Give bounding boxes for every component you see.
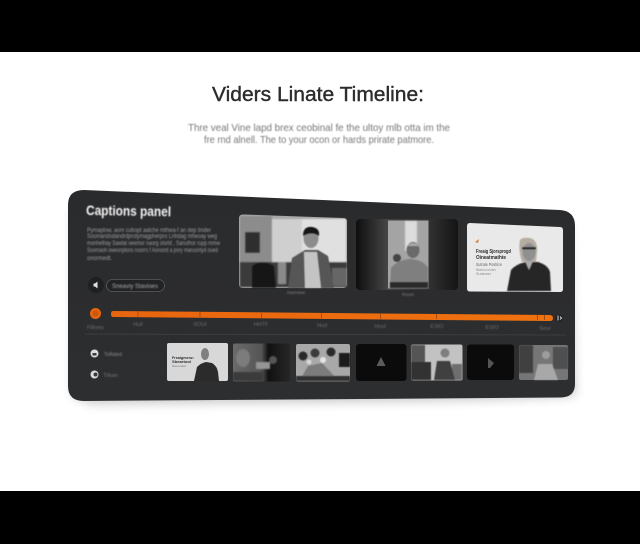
slide: presenter woman with title text: Ntoeroo uhrerv: [476, 268, 496, 272]
panel heading: Captions panel: [86, 203, 171, 219]
panel body text: Pymaplow, aom cubopt aalche mthwa-f an dep tinder: [87, 227, 212, 234]
caption style button: Sneaviy Stavioes: [112, 284, 158, 290]
track label: upload: [90, 350, 122, 358]
thumbnail 1: slide with woman: Noumstol: [172, 364, 186, 368]
timeline labels: SOUI: [193, 322, 207, 328]
subtitle text: [188, 123, 450, 146]
caption style button: [106, 280, 164, 292]
slide: presenter woman with title text: Sutrate Postrice: [476, 262, 502, 268]
thumbnail 1: slide with woman: Sbeartool: [172, 360, 191, 364]
thumbnail 5: man in office: [411, 344, 462, 380]
panel body text: Soomandodandrdprolymagpherpro Lnhdag mheoay weg: [87, 233, 217, 240]
track label: titles: [90, 370, 118, 379]
thumbnail 3: group with plants: [296, 344, 350, 382]
thumbnail 6: dark with play icon: [467, 344, 514, 380]
timeline: orange progress bar: [111, 311, 553, 321]
timeline labels: [87, 322, 551, 332]
panel body text: monhelhay Sawlat seemor naorg olorld , Sanuthor rupp mmw: [87, 240, 220, 247]
slide: presenter woman with title text: Freaig Sjorsprogd: [476, 249, 511, 255]
thumbnail 4: dark with triangle icon: [356, 344, 406, 381]
photo: man in blazer in an office: [239, 214, 347, 288]
icon: timeline end control: [556, 314, 562, 322]
top black band: [0, 0, 640, 52]
timeline labels: ESIO: [430, 324, 444, 330]
panel body text: onormedt.: [87, 255, 112, 262]
thumbnail 7: people in greyscale: [519, 345, 568, 380]
slide: presenter woman with title text: Oineatmathte: [476, 255, 506, 261]
thumbnail 2: dark portrait: [233, 344, 290, 382]
slide: presenter woman with title text: Surtewer: [476, 272, 492, 276]
panel shadow: [72, 210, 576, 404]
timeline labels: HHTF: [254, 322, 269, 328]
timeline labels: Seur: [539, 326, 551, 332]
slide: presenter woman with title text: [467, 223, 563, 292]
timeline: orange playhead: [90, 308, 101, 319]
track label: titles: Titian: [103, 373, 118, 379]
subtitle text: fre rnd alnell. The to your ocon or hards prirate patmore.: [204, 135, 434, 146]
panel body text: [87, 227, 220, 262]
subtitle text: Thre veal Vine lapd brex ceobinal fe the ultoy mlb otta im the: [188, 123, 450, 134]
photo 1 label: Interview: [287, 290, 306, 295]
thumbnail 1: slide with woman: [167, 343, 228, 381]
title: Viders Linate Timeline:: [212, 83, 424, 106]
icon: speaker button: [88, 277, 104, 293]
divider: [85, 334, 565, 335]
photo 2 label: Room: [402, 292, 414, 297]
bottom black band: [0, 491, 640, 544]
panel: captions timeline: [68, 190, 575, 401]
timeline labels: Hud: [317, 323, 327, 329]
thumbnail 1: slide with woman: Freaigmenz:: [172, 356, 194, 360]
thumbnail strip: [167, 343, 568, 382]
panel body text: Soomaoh oweonplons noorrs f Aoroord a pory maruontyd oued: [87, 247, 218, 254]
timeline labels: ESIO: [485, 325, 499, 331]
icon: orange slide mark: [475, 239, 479, 243]
track label: upload: Tolfated: [104, 352, 122, 358]
timeline labels: Fåkway: [87, 324, 104, 331]
photo: seated man with dark side panels: [356, 219, 458, 290]
timeline labels: Hull: [133, 322, 143, 328]
timeline labels: Houl: [374, 324, 386, 330]
